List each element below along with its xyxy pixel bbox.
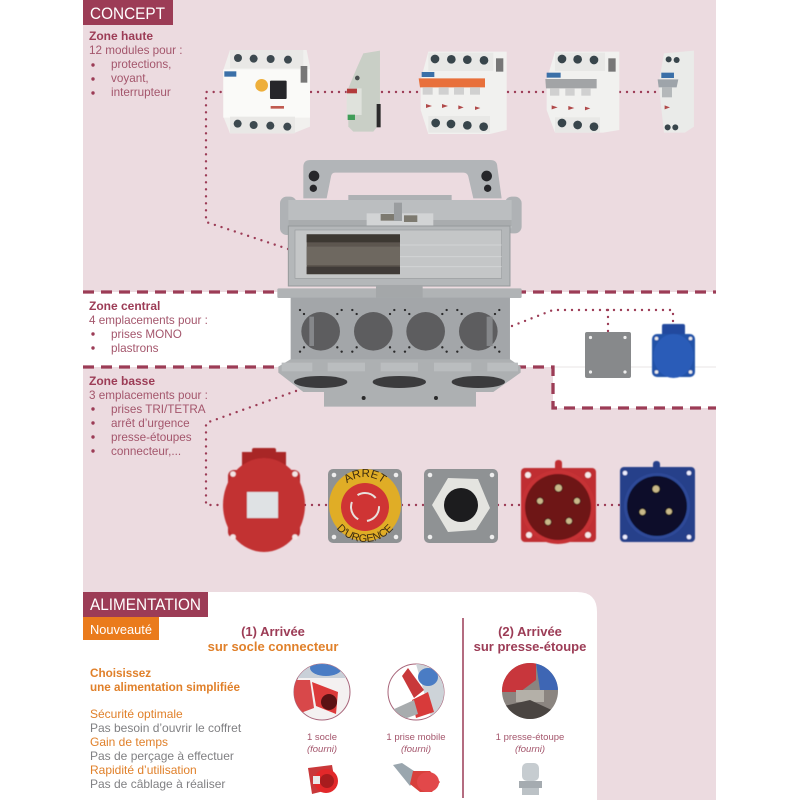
- icon: presse-étoupe photo: [502, 663, 558, 719]
- icon: emergency stop: ARRET: [346, 469, 388, 484]
- lower housing: [278, 359, 521, 407]
- lower bar: [277, 288, 522, 298]
- text block: benefits: une alimentation simplifiée: [90, 681, 241, 694]
- heading: concept: CONCEPT: [90, 4, 165, 23]
- text block: zone haute: Zone haute: [89, 29, 153, 43]
- icon: blue mono socket: [652, 324, 695, 378]
- text block: zone haute: 12 modules pour :: [89, 44, 183, 57]
- text block: zone basse: Zone basse: [89, 374, 155, 388]
- icon: emergency stop: [328, 469, 402, 543]
- text block: zone haute: voyant,: [111, 72, 149, 85]
- icon: indicator light module: [347, 51, 381, 132]
- badge: nouveauté: [83, 617, 159, 640]
- heading: arrivée 1: sur socle connecteur: [208, 639, 338, 654]
- badge: nouveauté: Nouveauté: [90, 622, 152, 637]
- text block: zone central: plastrons: [111, 342, 159, 355]
- text block: benefits: Pas besoin d’ouvrir le coffret: [90, 721, 242, 735]
- divider: [462, 618, 464, 798]
- caption: 1 prise mobile: (fourni): [401, 744, 431, 755]
- caption: 1 socle: [307, 732, 337, 755]
- text block: zone basse: connecteur,...: [111, 445, 181, 458]
- text block: zone haute: interrupteur: [111, 86, 171, 99]
- text block: benefits: Pas de câblage à réaliser: [90, 777, 225, 791]
- text block: benefits: Sécurité optimale: [90, 707, 183, 721]
- hinge bar: [280, 197, 297, 235]
- icon: blue plug inlet: [620, 461, 695, 542]
- dotted connector: zone basse: [206, 391, 620, 505]
- text block: benefits: [90, 667, 242, 791]
- text block: benefits: Gain de temps: [90, 735, 168, 749]
- icon: small mobile plug: [393, 763, 440, 792]
- text block: zone basse: presse-étoupes: [111, 431, 192, 444]
- icon: emergency stop: D'URGENCE: [337, 524, 394, 542]
- caption: 1 socle: 1 socle: [307, 732, 337, 743]
- icon: small red socle: [308, 765, 338, 794]
- icon: prise mobile photo: [388, 664, 444, 722]
- text block: zone basse: arrêt d’urgence: [111, 417, 190, 430]
- text block: zone central: Zone central: [89, 299, 160, 313]
- illustration: enclosure: [277, 160, 522, 407]
- dotted connector: zone haute: [206, 92, 658, 249]
- text block: zone basse: prises TRI/TETRA: [111, 403, 206, 416]
- text block: benefits: Choisissez: [90, 667, 151, 680]
- icon: cable gland plate: [424, 469, 498, 543]
- caption: 1 presse-étoupe: 1 presse-étoupe: [496, 732, 564, 743]
- icon: red socket: [223, 448, 305, 552]
- pink background: [83, 0, 716, 800]
- panel: alimentation: [83, 592, 597, 800]
- lid: [288, 226, 510, 286]
- icon: narrow breaker: [658, 51, 694, 133]
- panel: zone boundaries dashed lines: [83, 292, 716, 408]
- text block: zone central: [89, 299, 208, 355]
- text block: zone basse: [89, 374, 208, 458]
- heading: arrivée 2: (2) Arrivée: [498, 624, 562, 639]
- heading: arrivée 1: (1) Arrivée: [241, 624, 305, 639]
- icon: socle photo: [294, 660, 350, 720]
- caption: 1 socle: (fourni): [307, 744, 337, 755]
- heading: arrivée 2: sur presse-étoupe: [474, 639, 586, 654]
- text block: zone central: 4 emplacements pour :: [89, 314, 208, 327]
- central panel: [291, 298, 510, 361]
- icon: red plug inlet: [521, 460, 596, 544]
- icon: differential breaker: [223, 50, 310, 133]
- icon: three-pole breaker grey: [545, 52, 619, 133]
- text block: benefits: Pas de perçage à effectuer: [90, 749, 234, 763]
- dotted connector: zone central: [512, 310, 673, 332]
- caption: 1 presse-étoupe: [496, 732, 564, 755]
- handle: [303, 160, 502, 198]
- text block: zone haute: [89, 29, 183, 99]
- text block: zone haute: protections,: [111, 58, 171, 71]
- icon: four-pole breaker orange: [419, 52, 507, 134]
- heading: arrivée 1: [208, 624, 338, 654]
- text block: zone basse: 3 emplacements pour :: [89, 389, 208, 402]
- icon: small cable gland: [519, 763, 542, 795]
- icon: grey blank plate: [585, 332, 631, 378]
- caption: 1 presse-étoupe: (fourni): [515, 744, 545, 755]
- caption: 1 prise mobile: [386, 732, 446, 755]
- heading: arrivée 2: [474, 624, 586, 654]
- heading: alimentation: ALIMENTATION: [90, 595, 201, 614]
- text block: zone central: prises MONO: [111, 328, 182, 341]
- caption: 1 prise mobile: 1 prise mobile: [386, 732, 446, 743]
- text block: benefits: Rapidité d’utilisation: [90, 763, 197, 777]
- heading: alimentation: [83, 592, 208, 617]
